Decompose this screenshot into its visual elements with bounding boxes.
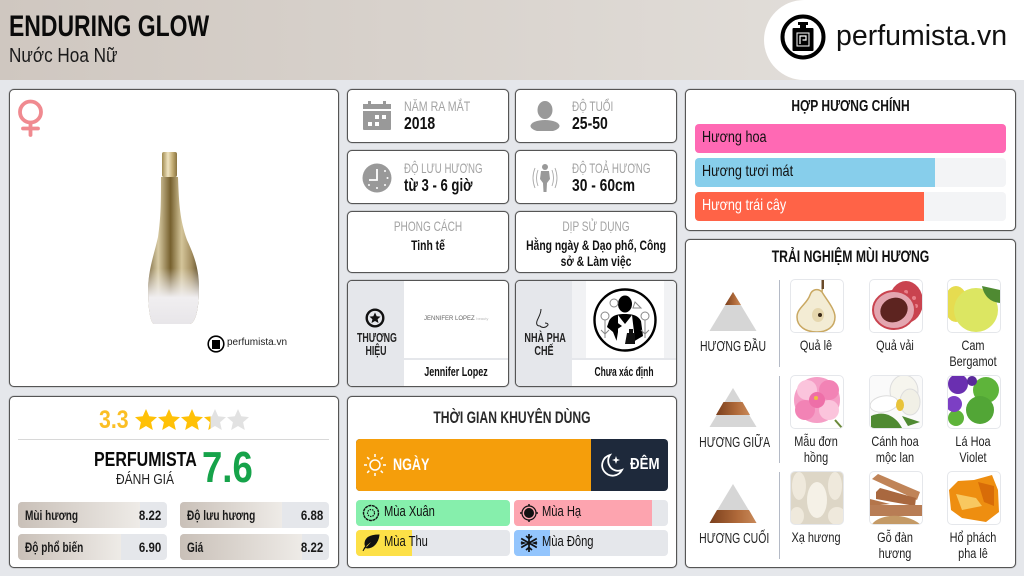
accord bar: floral: Hương hoa	[702, 129, 767, 146]
accord bar: fresh	[695, 158, 1006, 187]
card: perfumer	[515, 280, 677, 387]
card: longevity: ĐỘ LƯU HƯƠNG	[404, 160, 482, 176]
note name: magnolia: mộc lan	[876, 448, 914, 464]
note name: amber: pha lê	[958, 544, 988, 560]
score bar: Giá: 8.22	[301, 539, 323, 555]
score bar: Mùi hương: Mùi hương	[25, 507, 78, 523]
note image: pear	[790, 279, 844, 333]
score bar: Độ phổ biến: 6.90	[139, 539, 161, 555]
heading: TRẢI NGHIỆM MÙI HƯƠNG	[772, 248, 929, 266]
card: style: PHONG CÁCH	[394, 218, 462, 234]
card: longevity: từ 3 - 6 giờ	[404, 175, 472, 195]
note name: amber: Hổ phách	[950, 529, 996, 545]
icon: body with waves	[532, 164, 558, 192]
card: occasion: DỊP SỬ DỤNG	[562, 218, 630, 234]
card: projection: ĐỘ TOẢ HƯƠNG	[572, 160, 650, 176]
card: longevity	[347, 150, 509, 204]
note image: lychee	[869, 279, 923, 333]
season: spring	[356, 500, 510, 526]
card: age: 25-50	[572, 113, 608, 133]
watermark logo: perfumista.vn	[227, 337, 287, 348]
score bar: Độ phổ biến: Độ phổ biến	[25, 539, 83, 555]
accord bar: fruity	[695, 192, 1006, 221]
middle notes pyramid	[710, 388, 756, 427]
watermark logo	[207, 335, 287, 353]
note name: amber	[950, 529, 996, 561]
score bar: Giá	[180, 534, 329, 560]
icon: clock	[362, 164, 392, 192]
heading: HỢP HƯƠNG CHÍNH	[791, 98, 910, 115]
panel: product image	[9, 89, 339, 387]
card: occasion: sở & Làm việc	[561, 253, 631, 269]
card: perfumer: NHÀ PHA	[524, 330, 566, 345]
card: brand: Jennifer Lopez	[424, 365, 488, 379]
card: brand: THƯƠNG	[357, 330, 397, 345]
note name: bergamot: Bergamot	[949, 352, 997, 368]
season: winter: Mùa Đông	[542, 534, 594, 550]
brand logo text: JENNIFER LOPEZ beauty	[424, 316, 488, 322]
card: brand: HIỆU	[365, 343, 387, 358]
rating score: 3.3	[99, 406, 129, 434]
base notes pyramid	[710, 484, 756, 523]
perfumer illustration	[593, 288, 657, 352]
logo: perfumista.vn: perfumista.vn	[836, 20, 1007, 52]
note name: violet leaf: Violet	[959, 448, 987, 464]
score bar: Độ lưu hương: Độ lưu hương	[187, 507, 255, 523]
note name: musk: Xạ hương	[791, 529, 841, 545]
note name: peony: Mẫu đơn	[794, 433, 838, 449]
icon: person	[530, 101, 560, 131]
icon: sun	[364, 454, 386, 476]
season: autumn: Mùa Thu	[384, 534, 428, 550]
header band	[0, 0, 1024, 80]
subtitle: Nước Hoa Nữ	[9, 45, 117, 67]
top notes label: HƯƠNG ĐẦU	[700, 339, 766, 355]
panel: recommended time	[347, 396, 677, 568]
panel: scent experience	[685, 239, 1016, 568]
score bar: Độ lưu hương: 6.88	[301, 507, 323, 523]
card: release year: 2018	[404, 113, 435, 133]
note name: bergamot: Cam	[961, 337, 985, 353]
note image: musk	[790, 471, 844, 525]
season: spring: Mùa Xuân	[384, 504, 435, 520]
note name: lychee: Quả vải	[876, 337, 914, 353]
accord bar: fruity: Hương trái cây	[702, 197, 786, 214]
card: projection	[515, 150, 677, 204]
card: style: Tinh tế	[411, 237, 445, 253]
icon: moon	[601, 454, 624, 477]
logo: perfumista.vn	[764, 0, 1024, 80]
top notes pyramid	[710, 292, 756, 331]
card: brand	[347, 280, 509, 387]
season: autumn	[356, 530, 510, 556]
card: style	[347, 211, 509, 273]
card: perfumer: CHẾ	[534, 343, 554, 358]
score bar: Mùi hương: 8.22	[139, 507, 161, 523]
note image: magnolia	[869, 375, 923, 429]
card: perfumer: Chưa xác định	[594, 365, 654, 379]
panel: ratings	[9, 396, 339, 568]
icon: nose	[536, 309, 548, 328]
note name: sandalwood	[877, 529, 913, 561]
brand label: PERFUMISTA	[94, 449, 197, 471]
evaluation label: ĐÁNH GIÁ	[116, 471, 174, 488]
accord bar: floral	[695, 124, 1006, 153]
card: projection: 30 - 60cm	[572, 175, 635, 195]
card: occasion	[515, 211, 677, 273]
heading: THỜI GIAN KHUYÊN DÙNG	[433, 409, 591, 427]
card: age	[515, 89, 677, 143]
middle notes label: HƯƠNG GIỮA	[699, 435, 770, 451]
score bar: Giá: Giá	[187, 539, 203, 555]
note image: amber	[947, 471, 1001, 525]
base notes label: HƯƠNG CUỐI	[699, 531, 769, 547]
day/night bar: NGÀY	[393, 455, 429, 474]
score bar: Độ phổ biến	[18, 534, 167, 560]
accord bar: fresh: Hương tươi mát	[702, 163, 793, 180]
note name: peony	[794, 433, 838, 465]
perfume bottle	[148, 152, 199, 324]
score 7.6: 7.6	[202, 443, 253, 492]
note name: pear: Quả lê	[800, 337, 832, 353]
card: occasion: Hằng ngày & Dạo phố, Công	[526, 237, 666, 253]
icon: female symbol	[18, 100, 43, 137]
card: age: ĐỘ TUỔI	[572, 98, 613, 114]
day/night bar	[356, 439, 668, 491]
icon: star rating	[135, 409, 249, 430]
score bar: Mùi hương	[18, 502, 167, 528]
season: summer	[514, 500, 668, 526]
note image: peony	[790, 375, 844, 429]
card: release year	[347, 89, 509, 143]
icon: calendar	[363, 101, 391, 130]
title: ENDURING GLOW	[9, 10, 209, 43]
note image: sandalwood	[869, 471, 923, 525]
icon: star badge	[366, 308, 384, 328]
score bar: Độ lưu hương	[180, 502, 329, 528]
season: summer: Mùa Hạ	[542, 504, 581, 520]
note image: bergamot	[947, 279, 1001, 333]
day/night bar: ĐÊM	[630, 456, 660, 473]
note name: violet leaf: Lá Hoa	[955, 433, 991, 449]
note name: peony: hồng	[804, 448, 828, 464]
note name: sandalwood: Gỗ đàn	[877, 529, 913, 545]
note image: violet leaf	[947, 375, 1001, 429]
panel: main accords	[685, 89, 1016, 231]
note name: bergamot	[949, 337, 997, 369]
season: winter	[514, 530, 668, 556]
note name: magnolia	[871, 433, 919, 464]
note name: violet leaf	[955, 433, 991, 464]
card: release year: NĂM RA MẮT	[404, 98, 470, 114]
note name: sandalwood: hương	[879, 544, 911, 560]
note name: magnolia: Cánh hoa	[871, 433, 919, 449]
